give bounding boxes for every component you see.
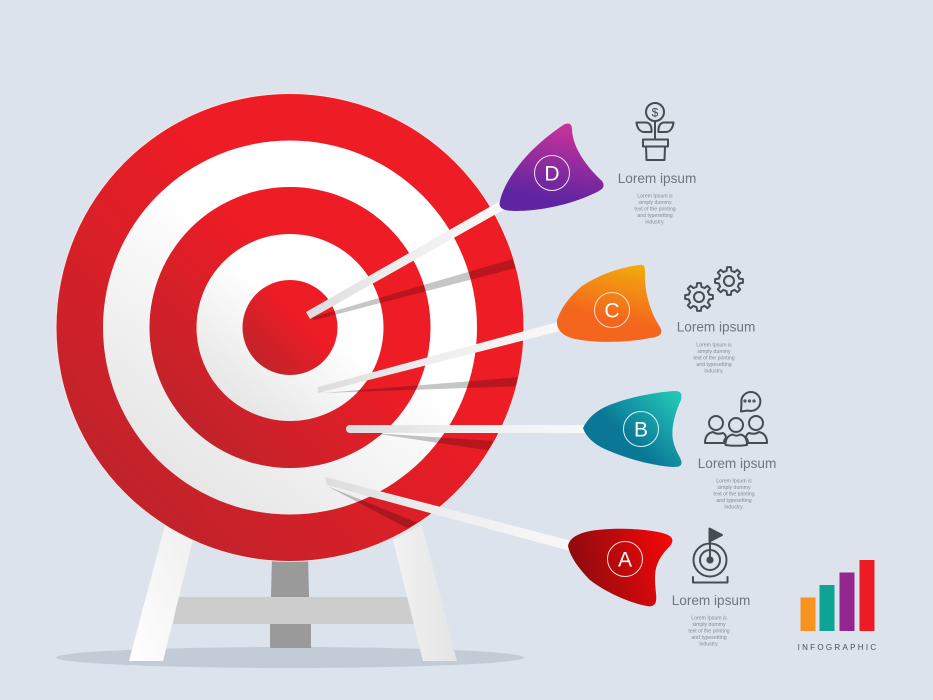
icon: gears [685,267,743,311]
text block C: text of the printing [693,356,735,362]
text block A: text of the printing [688,628,730,634]
text block D [618,171,696,226]
text block D: Lorem Ipsum is [637,194,673,200]
shaft A [325,477,572,551]
text block C: Lorem Ipsum is [696,342,732,348]
shaft D [306,201,505,319]
text block C: industry. [704,368,724,374]
fletching A [568,529,672,606]
text block A: simply dummy [692,622,726,628]
text block B: industry. [724,504,744,510]
badge A: A [618,548,632,572]
ground shadow [56,647,524,668]
text block B [698,456,776,510]
shaft C [318,322,560,393]
badge D [534,156,570,190]
logo caption: INFOGRAPHIC [798,643,878,652]
shaft B [346,425,585,433]
text block A [672,593,750,648]
text block B: Lorem ipsum [698,456,776,471]
badge B: B [634,418,648,442]
icon: money plant: $ [652,106,659,120]
text block B: text of the printing [713,492,755,498]
icon: money plant [636,103,674,160]
badge C [594,292,630,328]
text block C: simply dummy [697,349,731,355]
text block B: simply dummy [717,485,751,491]
icon: target with flag [693,528,728,582]
text block C [677,320,755,374]
badge B [624,412,658,446]
text block B: and typesetting [716,498,752,504]
text block D: industry. [645,220,665,226]
text block A: industry. [699,642,719,648]
badge A [608,542,642,576]
arrow D [306,123,604,319]
badge C: C [604,300,620,322]
badge D: D [544,162,560,186]
fletching C [557,265,661,342]
arrow A [325,477,672,606]
fletching D [500,123,604,211]
text block B: Lorem Ipsum is [716,478,752,484]
text block D: and typesetting [637,213,673,219]
text block D: Lorem ipsum [618,171,696,186]
arrow C [318,265,661,393]
text block A: Lorem Ipsum is [691,616,727,622]
text block A: and typesetting [691,635,727,641]
text block C: and typesetting [696,362,732,368]
bar chart logo [800,560,874,631]
arrow B [346,391,682,467]
fletching B [583,391,682,467]
text block D: simply dummy [638,200,672,206]
text block D: text of the printing [634,206,676,212]
target board [56,93,524,562]
target stand [129,525,457,661]
text block A: Lorem ipsum [672,593,750,608]
text block C: Lorem ipsum [677,320,755,334]
arrow shadows [310,259,522,528]
icon: team with speech bubble [705,392,767,446]
